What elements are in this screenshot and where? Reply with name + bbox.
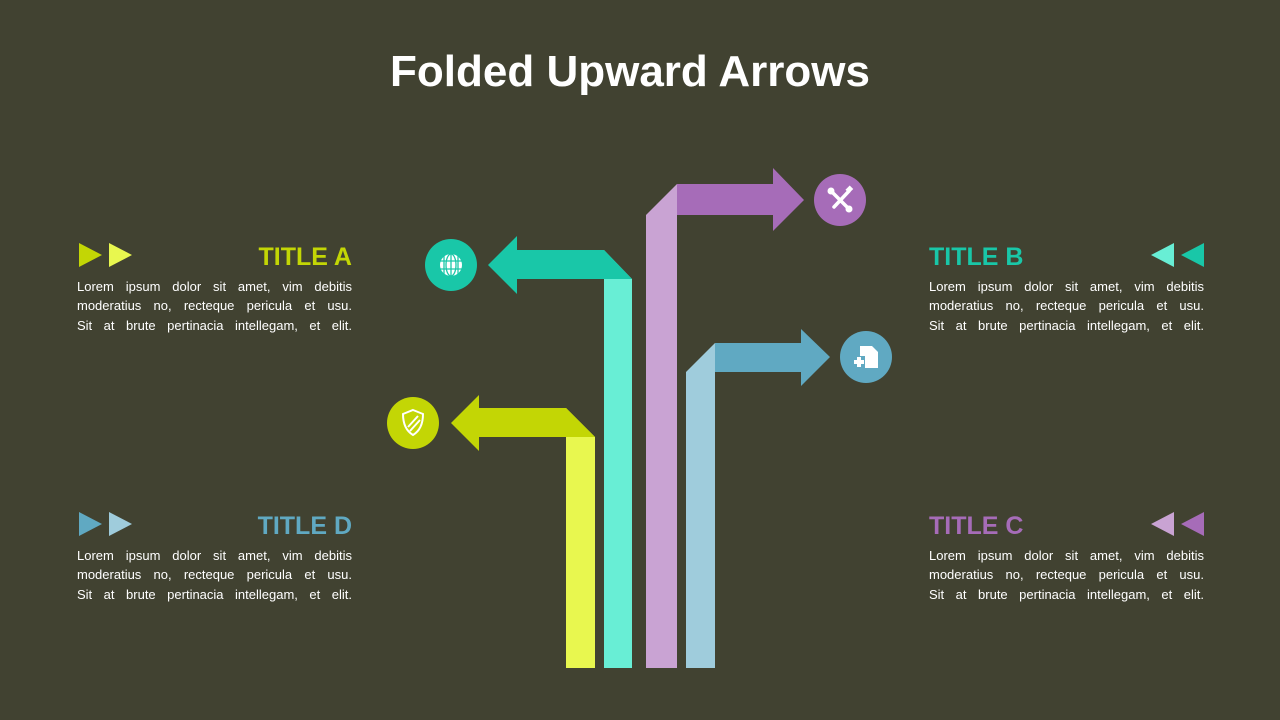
text block: title C: moderatius no, recteque pericula et usu. <box>929 567 1204 582</box>
icon: tools <box>814 174 866 226</box>
arrow: yellow-green <box>451 395 595 668</box>
text block: title C: Lorem ipsum dolor sit amet, vim debitis <box>929 548 1204 563</box>
text block: title B <box>929 243 1204 333</box>
text block: title B: Lorem ipsum dolor sit amet, vim debitis <box>929 279 1204 294</box>
text block: title B: TITLE B <box>929 243 1023 271</box>
text block: title D <box>77 512 352 602</box>
arrow: blue <box>686 329 830 668</box>
text block: title D: Lorem ipsum dolor sit amet, vim debitis <box>77 548 352 563</box>
text block: title D: moderatius no, recteque pericula et usu. <box>77 567 352 582</box>
text block: title C: TITLE C <box>929 512 1023 540</box>
icon: globe <box>425 239 477 291</box>
text block: title C <box>929 512 1204 602</box>
text block: title A: Lorem ipsum dolor sit amet, vim debitis <box>77 279 352 294</box>
text block: title D: TITLE D <box>258 512 352 540</box>
text block: title A: moderatius no, recteque pericula et usu. <box>77 298 352 313</box>
text block: title A: Sit at brute pertinacia intellegam, et elit. <box>77 318 352 333</box>
icon: add document <box>840 331 892 383</box>
arrow: teal <box>488 236 632 668</box>
icon: shield <box>387 397 439 449</box>
text block: title B: Sit at brute pertinacia intellegam, et elit. <box>929 318 1204 333</box>
text block: title A: TITLE A <box>258 243 352 271</box>
text block: title B: moderatius no, recteque pericula et usu. <box>929 298 1204 313</box>
title: Folded Upward Arrows <box>390 47 870 96</box>
text block: title C: Sit at brute pertinacia intellegam, et elit. <box>929 587 1204 602</box>
text block: title A <box>77 243 352 333</box>
arrow: purple <box>646 168 804 668</box>
text block: title D: Sit at brute pertinacia intellegam, et elit. <box>77 587 352 602</box>
